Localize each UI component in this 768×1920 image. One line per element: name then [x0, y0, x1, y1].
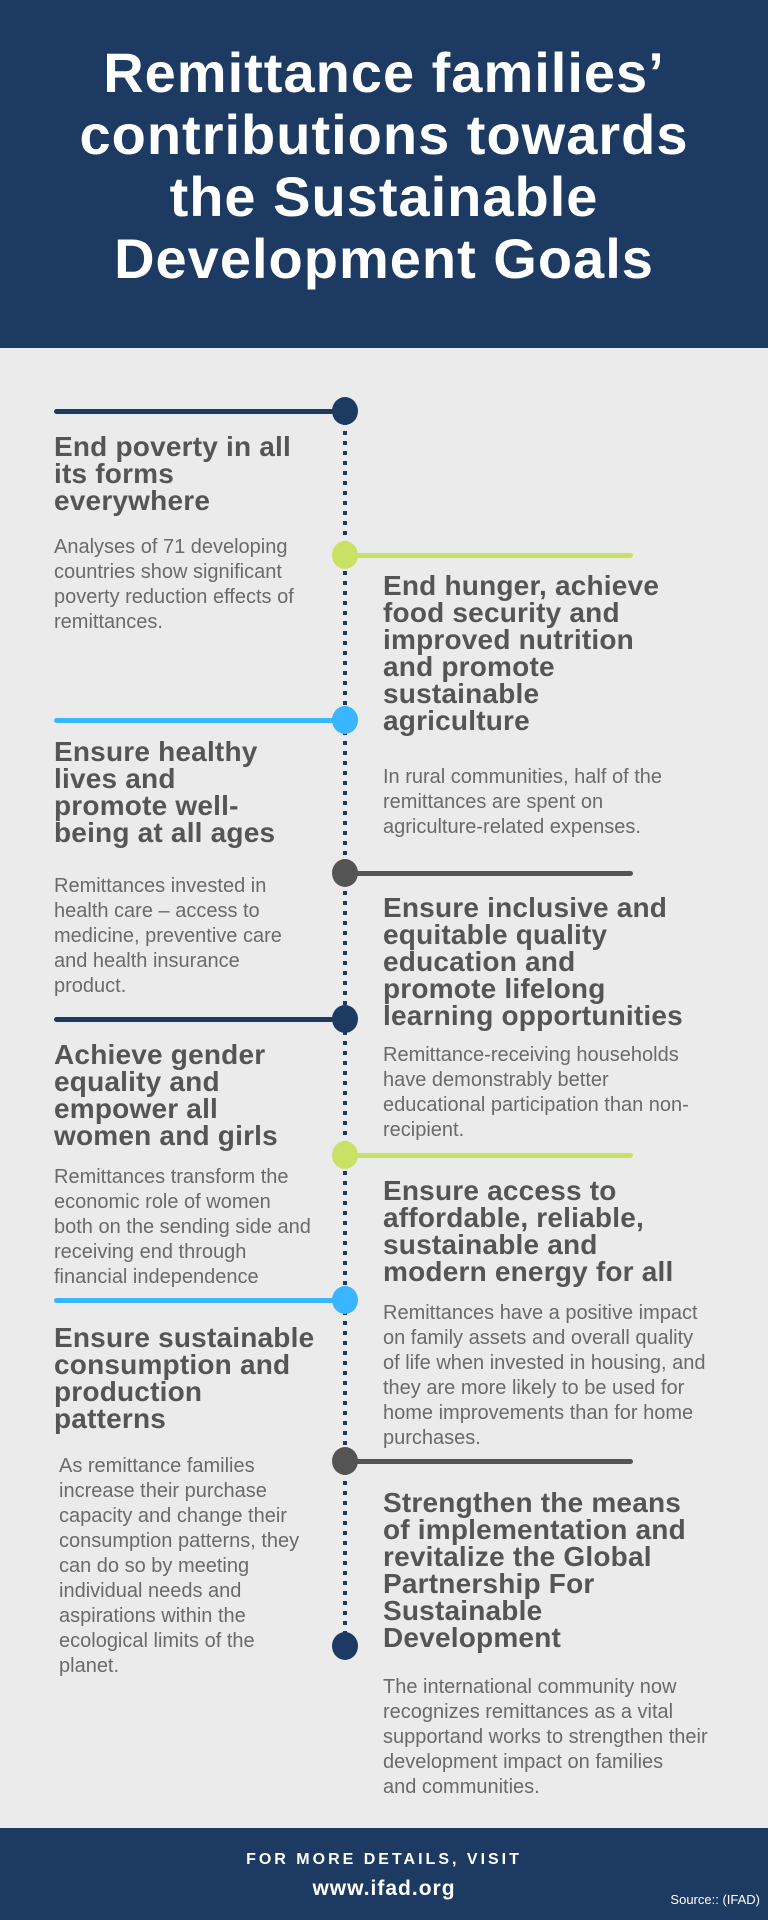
node	[332, 706, 358, 734]
heading 2: agriculture	[383, 705, 530, 736]
body 5: receiving end through	[54, 1241, 246, 1263]
footer	[0, 1828, 768, 1920]
body 6: they are more likely to be used for	[383, 1377, 684, 1399]
body 8: supportand works to strengthen their	[383, 1726, 708, 1748]
heading 5: equality and	[54, 1066, 220, 1097]
body 1: countries show significant	[54, 561, 282, 583]
body 4: Remittance-receiving households	[383, 1044, 679, 1066]
title: contributions towards	[80, 103, 688, 166]
connector line	[54, 409, 334, 414]
body 3: Remittances invested in	[54, 875, 266, 897]
body 7: individual needs and	[59, 1580, 241, 1602]
item 4 connector	[332, 859, 633, 887]
body 8: recognizes remittances as a vital	[383, 1701, 673, 1723]
title: the Sustainable	[170, 165, 598, 228]
heading 7: patterns	[54, 1403, 166, 1434]
node	[332, 1005, 358, 1033]
body 8: development impact on families	[383, 1751, 663, 1773]
heading 6: affordable, reliable,	[383, 1202, 644, 1233]
item 3 connector	[54, 706, 358, 734]
body 7: ecological limits of the	[59, 1630, 255, 1652]
body 7: aspirations within the	[59, 1605, 246, 1627]
heading 2: End hunger, achieve	[383, 570, 659, 601]
heading 8: Strengthen the means	[383, 1487, 681, 1518]
heading 3: lives and	[54, 763, 176, 794]
heading 8: Partnership For	[383, 1568, 594, 1599]
body 3	[54, 875, 282, 997]
item 7 connector	[54, 1286, 358, 1314]
node	[332, 859, 358, 887]
heading 1: everywhere	[54, 485, 210, 516]
heading 5: women and girls	[54, 1120, 278, 1151]
body 4: educational participation than non-	[383, 1094, 689, 1116]
body 4	[383, 1044, 689, 1141]
body 2: In rural communities, half of the	[383, 766, 662, 788]
body 3: medicine, preventive care	[54, 925, 282, 947]
footer label: FOR MORE DETAILS, VISIT	[246, 1851, 522, 1868]
heading 3	[54, 736, 275, 848]
body 7: As remittance families	[59, 1455, 255, 1477]
heading 1: its forms	[54, 458, 174, 489]
body 5: Remittances transform the	[54, 1166, 289, 1188]
heading 4: equitable quality	[383, 919, 607, 950]
heading 2: sustainable	[383, 678, 539, 709]
heading 6	[383, 1175, 674, 1287]
item 5 connector	[54, 1005, 358, 1033]
body 6: purchases.	[383, 1427, 481, 1449]
body 6	[383, 1302, 705, 1449]
heading 4: promote lifelong	[383, 973, 606, 1004]
body 8: The international community now	[383, 1676, 676, 1698]
heading 8: revitalize the Global	[383, 1541, 652, 1572]
body 6: of life when invested in housing, and	[383, 1352, 705, 1374]
heading 7: consumption and	[54, 1349, 290, 1380]
item 2 connector	[332, 541, 633, 569]
node	[332, 541, 358, 569]
heading 3: Ensure healthy	[54, 736, 258, 767]
heading 4: education and	[383, 946, 575, 977]
body 6: Remittances have a positive impact	[383, 1302, 698, 1324]
item 8 connector	[332, 1447, 633, 1475]
end node	[332, 1632, 358, 1660]
body 2: agriculture-related expenses.	[383, 816, 641, 838]
heading 5	[54, 1039, 278, 1151]
body 5: financial independence	[54, 1266, 259, 1288]
heading 5: Achieve gender	[54, 1039, 265, 1070]
source: Source:: (IFAD)	[670, 1892, 760, 1907]
item 6 connector	[332, 1141, 633, 1169]
heading 4: Ensure inclusive and	[383, 892, 667, 923]
body 7	[59, 1455, 299, 1677]
heading 8: of implementation and	[383, 1514, 686, 1545]
body 2: remittances are spent on	[383, 791, 603, 813]
body 6: on family assets and overall quality	[383, 1327, 693, 1349]
body 7: increase their purchase	[59, 1480, 267, 1502]
footer url: www.ifad.org	[312, 1877, 456, 1900]
body 1: remittances.	[54, 611, 163, 633]
body 3: health care – access to	[54, 900, 260, 922]
heading 8: Development	[383, 1622, 561, 1653]
heading 2	[383, 570, 659, 736]
body 7: capacity and change their	[59, 1505, 287, 1527]
body 8: and communities.	[383, 1776, 540, 1798]
heading 1: End poverty in all	[54, 431, 291, 462]
body 3: and health insurance	[54, 950, 240, 972]
heading 2: improved nutrition	[383, 624, 634, 655]
body 1: poverty reduction effects of	[54, 586, 294, 608]
heading 7: Ensure sustainable	[54, 1322, 314, 1353]
body 5	[54, 1166, 311, 1288]
body 4: have demonstrably better	[383, 1069, 609, 1091]
title: Remittance families’	[103, 41, 665, 104]
timeline: dotted line	[343, 411, 347, 1645]
body 7: planet.	[59, 1655, 119, 1677]
body 6: home improvements than for home	[383, 1402, 693, 1424]
node	[332, 397, 358, 425]
title	[80, 41, 688, 290]
heading 4: learning opportunities	[383, 1000, 683, 1031]
item 1	[54, 397, 358, 425]
heading 8	[383, 1487, 686, 1653]
header	[0, 0, 768, 348]
node	[332, 1286, 358, 1314]
heading 2: food security and	[383, 597, 620, 628]
heading 2: and promote	[383, 651, 555, 682]
body 1: Analyses of 71 developing	[54, 536, 288, 558]
heading 6: sustainable and	[383, 1229, 598, 1260]
heading 6: modern energy for all	[383, 1256, 674, 1287]
heading 4	[383, 892, 683, 1031]
body 3: product.	[54, 975, 126, 997]
heading 7	[54, 1322, 314, 1434]
heading 7: production	[54, 1376, 202, 1407]
heading 6: Ensure access to	[383, 1175, 617, 1206]
heading 3: being at all ages	[54, 817, 275, 848]
body 7: consumption patterns, they	[59, 1530, 299, 1552]
node	[332, 1141, 358, 1169]
title: Development Goals	[114, 227, 654, 290]
body 5: both on the sending side and	[54, 1216, 311, 1238]
body 7: can do so by meeting	[59, 1555, 249, 1577]
body 1	[54, 536, 294, 633]
body 5: economic role of women	[54, 1191, 271, 1213]
body 2	[383, 766, 662, 838]
body 8	[383, 1676, 708, 1798]
heading 1	[54, 431, 291, 516]
node	[332, 1447, 358, 1475]
body 4: recipient.	[383, 1119, 464, 1141]
heading 5: empower all	[54, 1093, 218, 1124]
heading 3: promote well-	[54, 790, 239, 821]
heading 8: Sustainable	[383, 1595, 542, 1626]
